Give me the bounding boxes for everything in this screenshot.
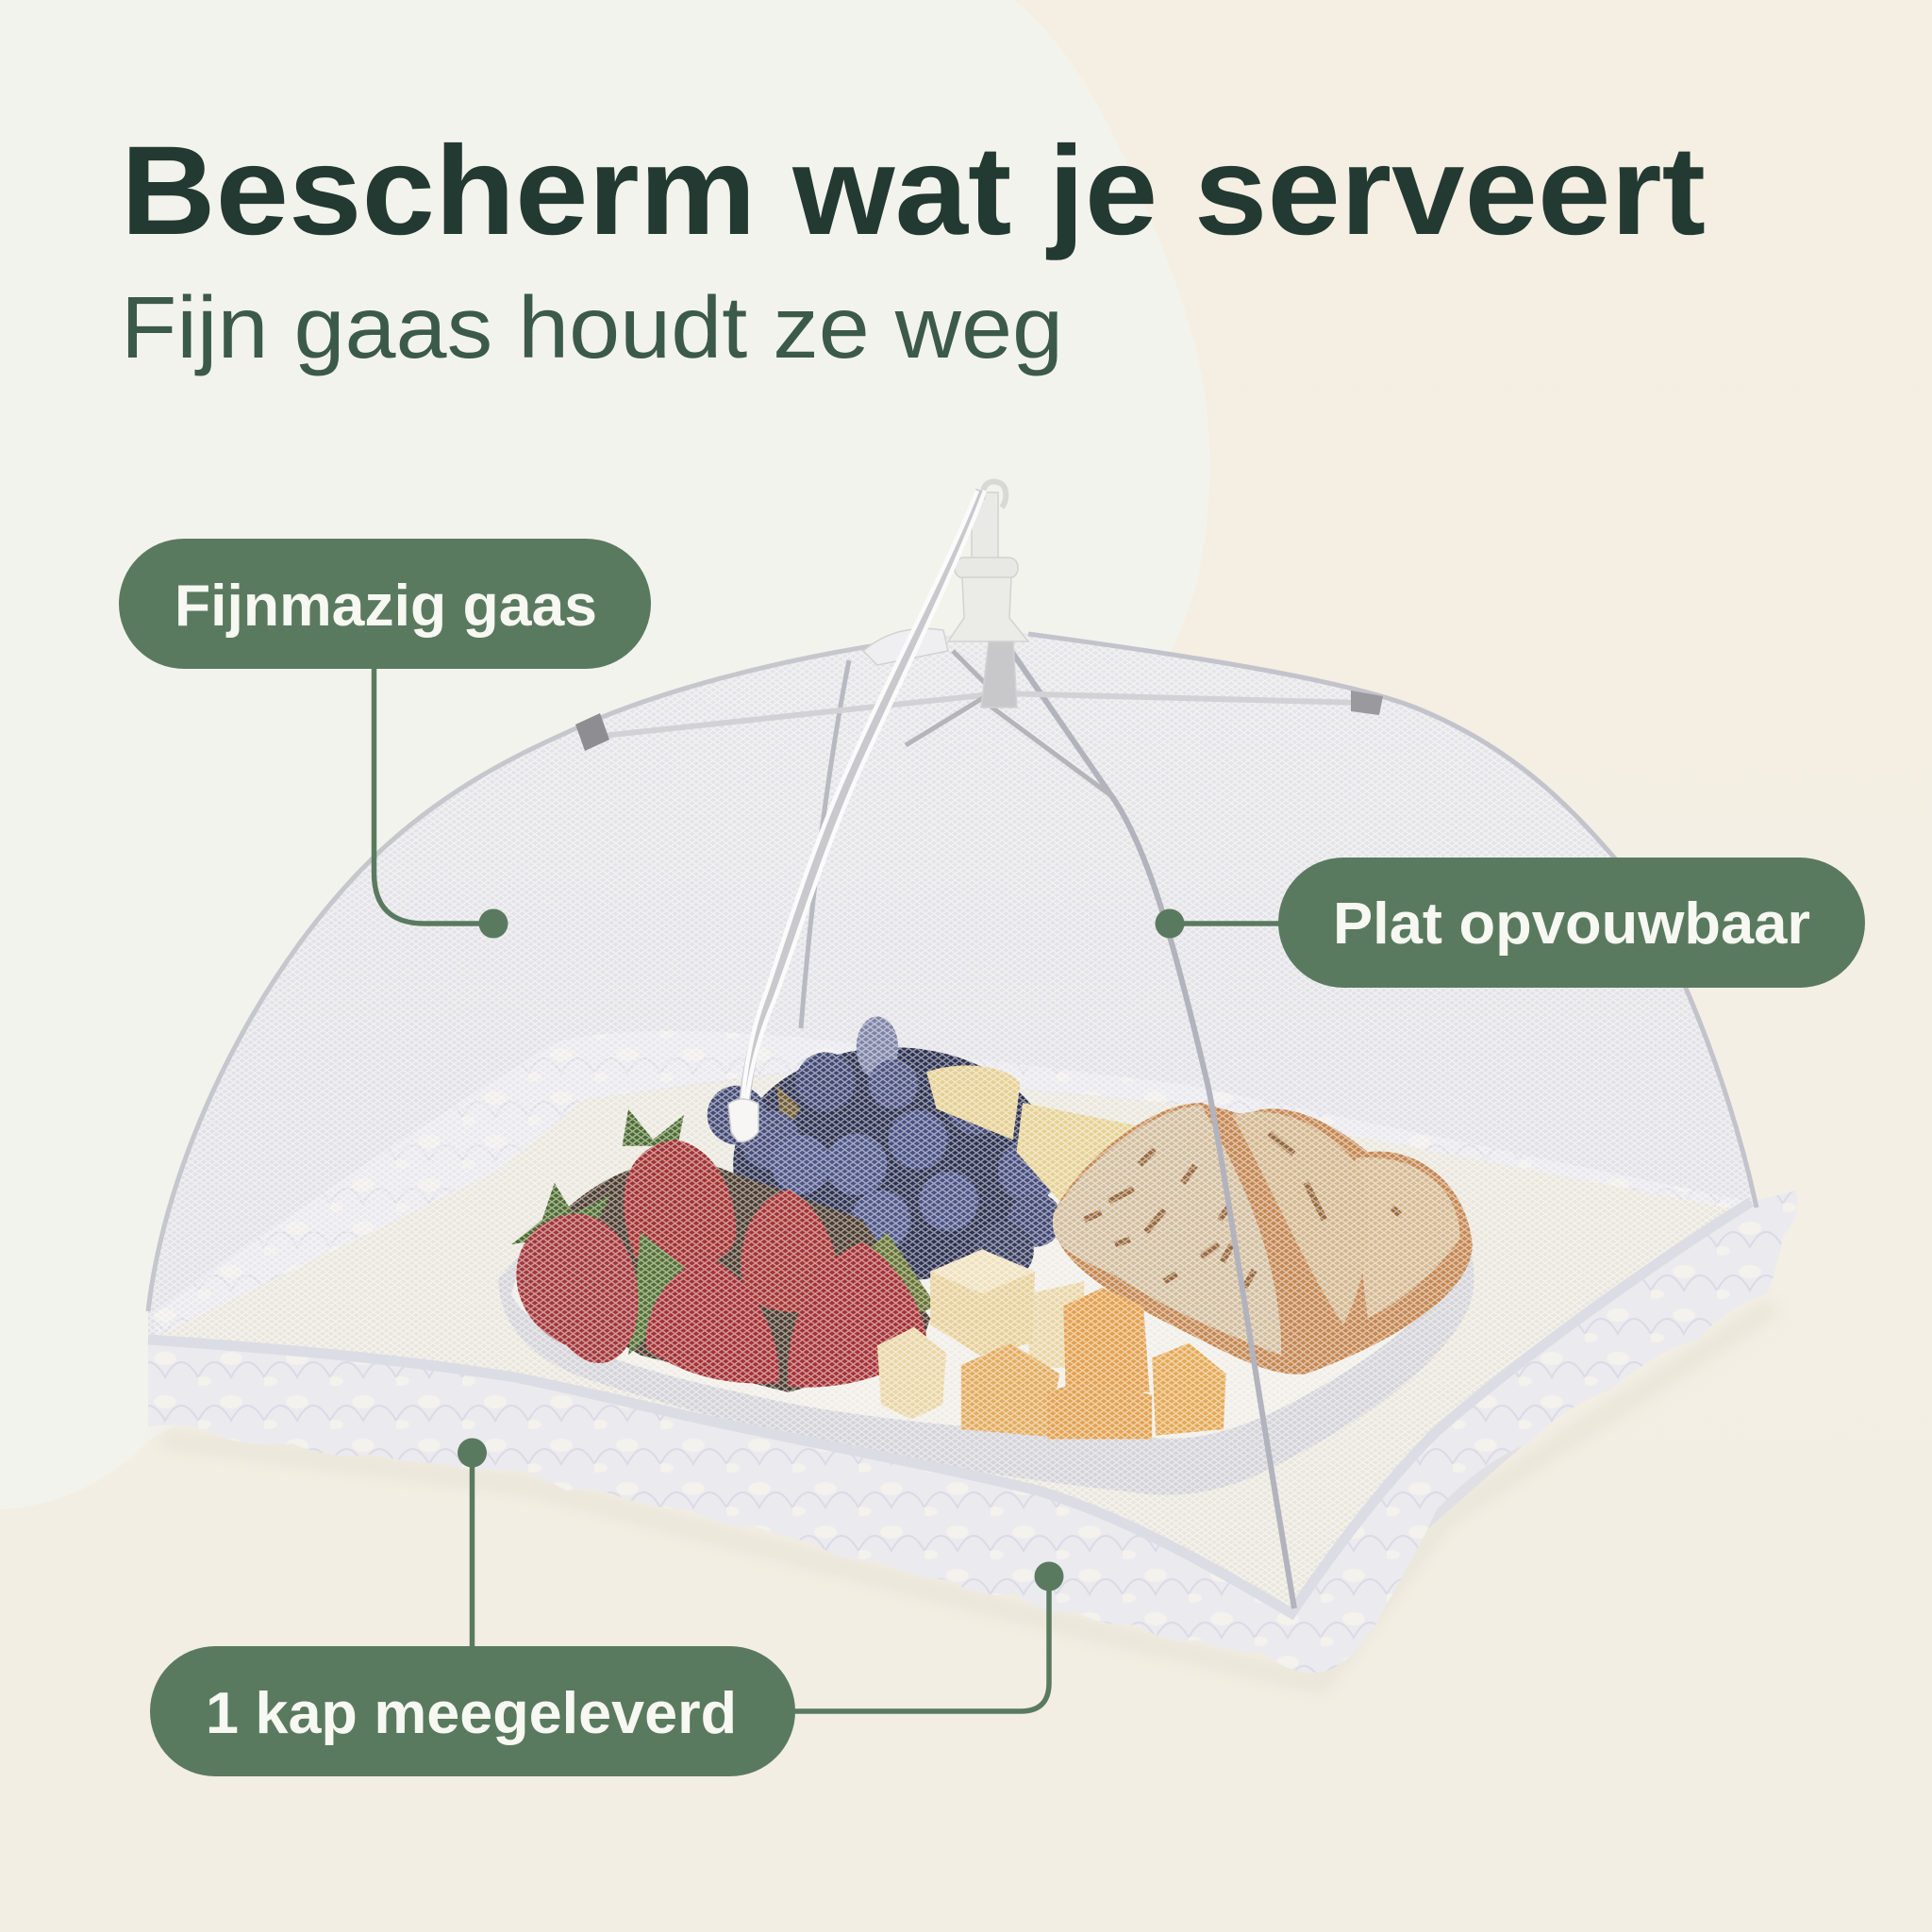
back lace band: [151, 1031, 1751, 1340]
leader line: [374, 669, 493, 924]
arch ribs: [148, 634, 1757, 1608]
strawberries: [511, 1109, 937, 1392]
frame struts and patches: [575, 651, 1383, 797]
shadow under cover: [160, 1307, 1774, 1684]
anchor dot: [479, 909, 508, 938]
pill label: Plat opvouwbaar: [1333, 891, 1810, 957]
hub and hook: [863, 482, 1028, 708]
pill: [119, 539, 651, 669]
plate rim: [498, 1132, 1474, 1495]
subtitle: Fijn gaas houdt ze weg: [121, 278, 1063, 376]
anchor dot right: [1034, 1562, 1064, 1591]
grapes: [708, 1017, 1062, 1281]
pill: [1278, 858, 1865, 988]
back cheese: [926, 1066, 1146, 1201]
front left lace: [148, 1340, 1324, 1673]
callout: plat opvouwbaar: [1155, 858, 1865, 988]
callout: 1 kap meegeleverd: [150, 1438, 1064, 1776]
background blob: [0, 0, 1210, 1509]
pull cord: [742, 491, 985, 1104]
bread: [1053, 1103, 1473, 1374]
pill label: Fijnmazig gaas: [175, 574, 597, 639]
cover edge tubes: [148, 1202, 1751, 1613]
callout: fijnmazig gaas: [119, 539, 651, 938]
leader lines: [472, 1453, 1049, 1711]
anchor dot: [1155, 909, 1185, 938]
pill label: 1 kap meegeleverd: [206, 1681, 737, 1746]
plate: [498, 1132, 1474, 1495]
cover floor: [160, 1071, 1745, 1613]
food cover product illustration: [148, 482, 1797, 1684]
pill: [150, 1646, 795, 1776]
dome shell: [148, 630, 1774, 1623]
leader line: [1170, 921, 1283, 926]
mesh overlay: [148, 634, 1757, 1613]
front right lace: [1291, 1191, 1797, 1672]
title: Bescherm wat je serveert: [121, 121, 1706, 261]
cheese cubes: [877, 1249, 1226, 1440]
anchor dot left: [458, 1438, 487, 1468]
plate surface: [511, 1141, 1467, 1439]
cord toggle: [728, 1099, 758, 1141]
food: [511, 1017, 1473, 1440]
